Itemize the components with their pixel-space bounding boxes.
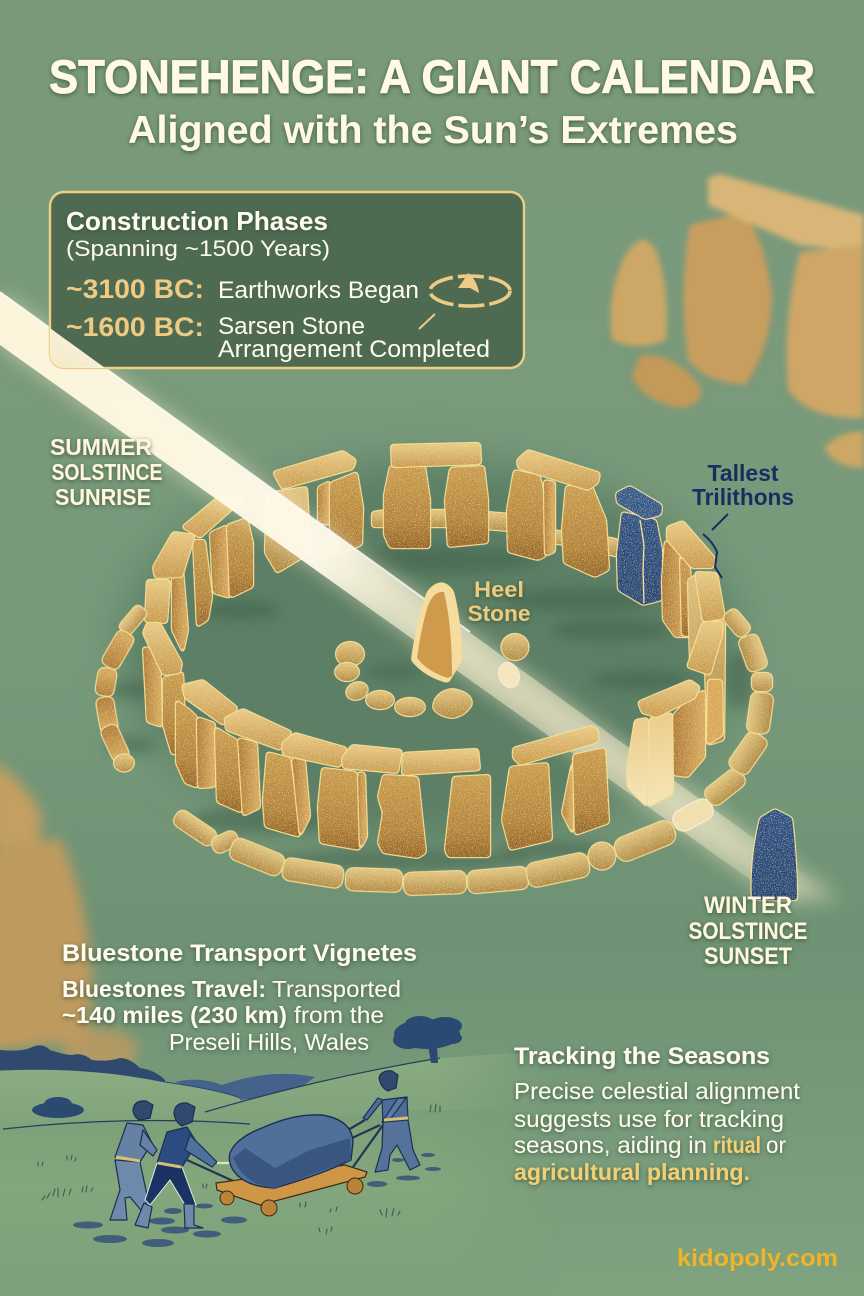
tracking the seasons text: ritual <box>713 1132 761 1158</box>
bush <box>32 1097 84 1118</box>
west uprights and lintels <box>143 532 195 755</box>
tracking the seasons text: agricultural planning. <box>514 1159 750 1185</box>
bluestone boulder <box>229 1115 353 1188</box>
treeline <box>0 1045 165 1090</box>
outer ring west <box>95 604 148 772</box>
front lintels <box>182 680 480 775</box>
small stones <box>335 634 528 718</box>
tall eastern uprights <box>687 572 725 745</box>
bluestone transport text <box>62 976 401 1055</box>
outer ring east <box>702 607 774 808</box>
east trilithon lit by beam <box>627 680 723 807</box>
label: winter solstice sunset: SOLSTINCE <box>688 918 808 945</box>
winter solstice bluestone <box>752 809 797 900</box>
sunlight beam <box>0 292 850 908</box>
panel subheading: (Spanning ~1500 Years) <box>66 236 330 261</box>
tracking the seasons text <box>514 1078 801 1185</box>
bluestone transport text: ~140 miles (230 km) <box>62 1002 287 1028</box>
label: winter solstice sunset: SUNSET <box>704 943 792 970</box>
tracking the seasons text: suggests use for tracking <box>514 1106 784 1132</box>
label: tallest trilithons <box>692 460 794 578</box>
heel stone <box>412 584 461 682</box>
event one: Earthworks Began <box>218 277 419 304</box>
bluestone transport vignette illustration <box>0 1016 512 1247</box>
tracking the seasons heading: Tracking the Seasons <box>514 1043 770 1070</box>
construction phases panel <box>48 190 526 370</box>
trilithon west lintel one <box>172 493 253 653</box>
label: winter solstice sunset <box>688 892 808 970</box>
date two: ~1600 BC: <box>66 312 204 342</box>
bluestone transport text: Preseli Hills, Wales <box>169 1029 369 1055</box>
bluestone <box>616 486 662 605</box>
title: STONEHENGE: A GIANT CALENDAR <box>49 50 815 103</box>
bluestone transport text: from the <box>294 1002 384 1028</box>
label: heel stone: Stone <box>468 601 530 626</box>
distant hills <box>175 1074 315 1100</box>
tree <box>393 1016 462 1063</box>
southeast trilithon <box>502 726 609 850</box>
outer ring front <box>172 795 717 895</box>
shadows on ground <box>104 546 754 870</box>
tracking the seasons text: Precise celestial alignment <box>514 1078 801 1104</box>
label: winter solstice sunset: WINTER <box>704 892 792 919</box>
event two continued: Arrangement Completed <box>218 336 490 363</box>
label: tallest trilithons: Trilithons <box>692 484 794 510</box>
tracking the seasons text: or <box>766 1132 786 1158</box>
grass tufts <box>38 1104 440 1234</box>
label: summer solstice sunrise <box>50 434 162 510</box>
tracking the seasons text: seasons, aiding in <box>514 1132 707 1158</box>
tallest trilithon <box>662 521 715 637</box>
ground inside stone circle <box>120 460 740 840</box>
front uprights <box>176 700 490 858</box>
stone circle back section behind the beam <box>172 451 619 653</box>
subtitle: Aligned with the Sun’s Extremes <box>128 109 738 152</box>
ropes and poles <box>187 1120 383 1190</box>
figure: left hauler <box>110 1101 157 1220</box>
wooden cart <box>216 1165 367 1216</box>
brand: kidopoly.com: kidopoly.com <box>677 1245 838 1272</box>
label: summer solstice sunrise: SOLSTINCE <box>52 459 162 485</box>
blurred foreground stones lower left <box>0 760 138 1072</box>
icon: earthwork ring <box>419 273 510 329</box>
trilithon back center <box>384 443 488 548</box>
back sarsen stubs <box>372 510 619 557</box>
trilithon north <box>507 450 609 577</box>
label: heel stone <box>468 577 530 626</box>
bluestone transport text: Transported <box>272 976 401 1002</box>
bluestone transport heading: Bluestone Transport Vignetes <box>62 940 417 967</box>
bluestone transport text: Bluestones Travel: <box>62 976 266 1002</box>
label: summer solstice sunrise: SUMMER <box>50 434 152 460</box>
date one: ~3100 BC: <box>66 274 204 304</box>
stone circle front section <box>95 443 797 900</box>
label: tallest trilithons: Tallest <box>708 460 779 486</box>
figure: right hauler <box>363 1071 420 1172</box>
event two: Sarsen Stone <box>218 313 365 340</box>
panel heading: Construction Phases <box>66 206 328 236</box>
footprints <box>73 1153 441 1247</box>
trilithon northwest <box>265 451 363 573</box>
label: summer solstice sunrise: SUNRISE <box>55 484 151 510</box>
hills and meadow <box>0 1054 512 1200</box>
label: heel stone: Heel <box>474 577 524 602</box>
blurred foreground stones top right <box>610 174 864 468</box>
figure: centre hauler <box>135 1103 217 1228</box>
